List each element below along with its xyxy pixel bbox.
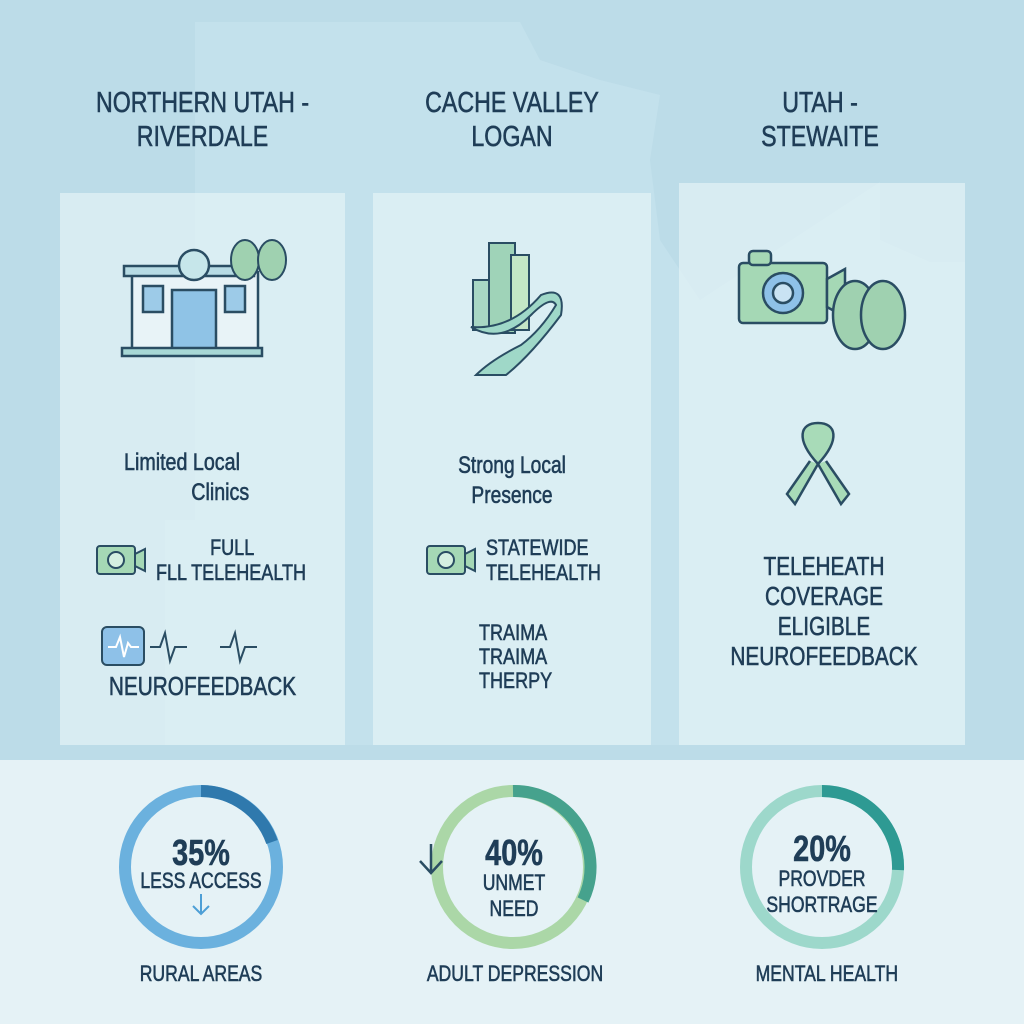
ring: 20% provider shortage (740, 785, 904, 986)
heading: Utah Stewaite: STEWAITE (761, 121, 879, 153)
icon: ribbon (786, 422, 850, 506)
icon: neurofeedback waves (101, 626, 257, 666)
ring: 40% unmet need: NEED (490, 896, 538, 921)
text: limited local clinics (124, 449, 249, 506)
text: trauma therapy (479, 620, 552, 693)
icon: camera small (96, 545, 146, 575)
ring: 40% unmet need: UNMET (483, 870, 545, 895)
background map shape (0, 0, 1024, 760)
heading: Utah Stewaite: UTAH - (782, 87, 858, 119)
text: telehealth coverage: NEUROFEEDBACK (730, 641, 918, 671)
text: full telehealth (156, 535, 306, 585)
heading: Utah Stewaite (761, 87, 879, 153)
icon: camera small (426, 545, 476, 575)
bottom band (0, 760, 1024, 1024)
ring: 40% unmet need: 40% (485, 832, 543, 873)
ring: 20% provider shortage: MENTAL HEALTH (756, 961, 898, 986)
heading: Northern Utah (96, 87, 309, 153)
panel: Riverdale (60, 193, 345, 745)
text: telehealth coverage: ELIGIBLE (778, 611, 870, 641)
text: telehealth coverage (730, 551, 918, 671)
text: strong local presence (458, 452, 566, 509)
heading: Cache Valley: CACHE VALLEY (425, 87, 599, 119)
text: strong local presence: Strong Local (458, 452, 566, 479)
text: limited local clinics: Limited Local (124, 449, 240, 476)
text: statewide telehealth (486, 535, 601, 585)
ring: 35% rural: LESS ACCESS (140, 868, 262, 893)
ring: 20% provider shortage: 20% (793, 828, 851, 869)
ring: 20% provider shortage: PROVDER (778, 866, 866, 891)
text: full telehealth: FULL (210, 535, 254, 560)
text: statewide telehealth: STATEWIDE (486, 535, 589, 560)
ring: 35% rural: RURAL AREAS (140, 961, 262, 986)
heading: Cache Valley (425, 87, 599, 153)
ring: 35% rural: 35% (172, 832, 230, 873)
heading: Northern Utah: RIVERDALE (137, 121, 268, 153)
text: telehealth coverage: COVERAGE (765, 581, 883, 611)
text: statewide telehealth: TELEHEALTH (486, 560, 601, 585)
ring: 35% rural (119, 785, 283, 986)
text: trauma therapy: TRAIMA (479, 644, 547, 669)
panel: Stewaite (679, 183, 965, 745)
text: limited local clinics: Clinics (191, 479, 249, 506)
ring: 20% provider shortage: SHORTRAGE (766, 892, 878, 917)
text: neurofeedback: NEUROFEEDBACK (109, 671, 296, 701)
text: strong local presence: Presence (471, 482, 553, 509)
ring: 40% unmet need: ADULT DEPRESSION (427, 961, 603, 986)
icon: camera and brain (738, 250, 906, 350)
ring: 40% unmet need (419, 785, 603, 986)
heading: Cache Valley: LOGAN (471, 121, 553, 153)
text: trauma therapy: TRAIMA (479, 620, 547, 645)
icon: clinic with brain (120, 239, 287, 358)
text: telehealth coverage: TELEHEATH (764, 551, 884, 581)
panel: Logan (373, 193, 651, 745)
text: full telehealth: FLL TELEHEALTH (156, 560, 306, 585)
icon: city with road (470, 242, 563, 376)
heading: Northern Utah: NORTHERN UTAH - (96, 87, 309, 119)
text: trauma therapy: THERPY (479, 668, 552, 693)
